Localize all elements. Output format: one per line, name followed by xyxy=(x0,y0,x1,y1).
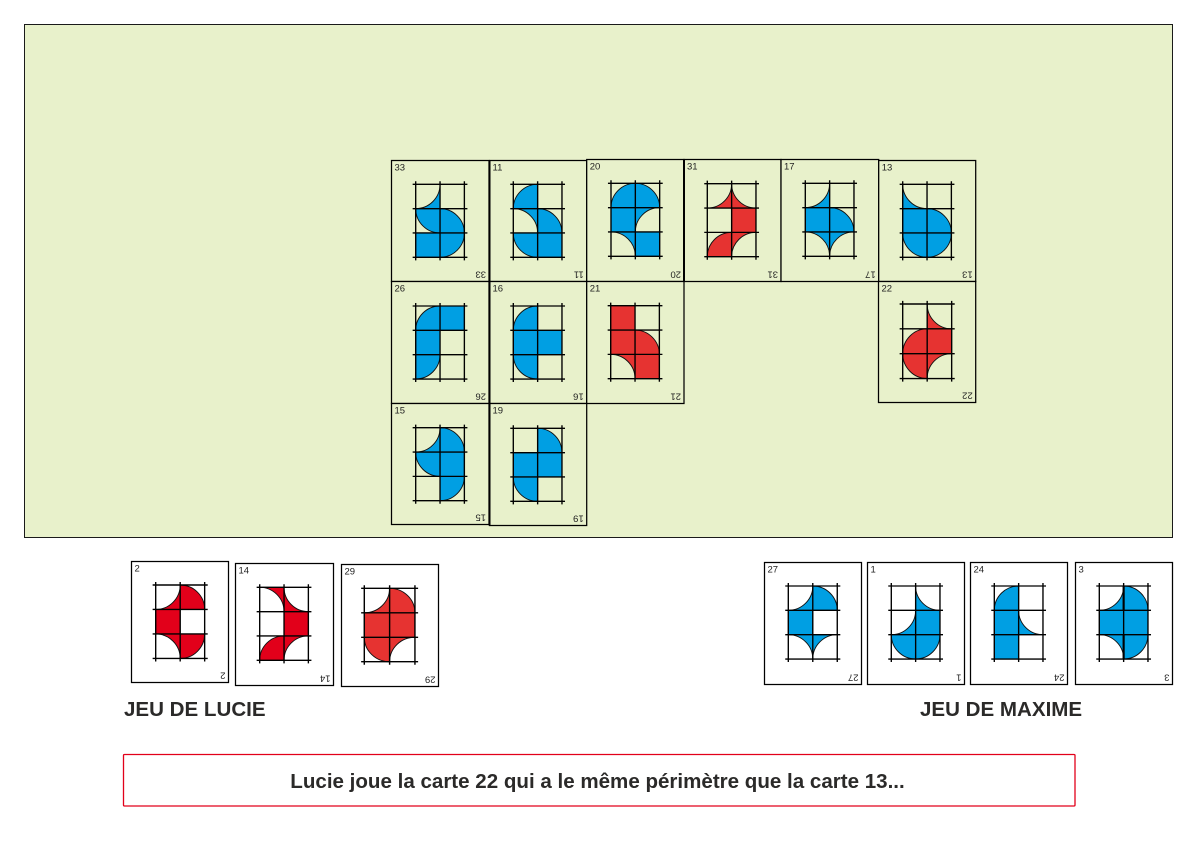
card 26: 26 xyxy=(394,284,405,294)
card 22: 22 xyxy=(882,284,892,294)
card 13: 13 xyxy=(962,268,973,280)
card 22 xyxy=(878,282,976,402)
panel: game board xyxy=(24,24,1172,538)
card 2 (Lucie): 2 xyxy=(220,670,226,680)
card 1 (Maxime) xyxy=(868,562,964,684)
card 13: 13 xyxy=(882,162,892,174)
callout: move description xyxy=(124,754,1075,806)
card 15: 15 xyxy=(475,512,486,522)
card 33: 33 xyxy=(394,162,405,174)
heading: Maxime's hand: JEU DE MAXIME xyxy=(920,698,1082,721)
card 24 (Maxime) xyxy=(970,562,1068,684)
card 21: 21 xyxy=(590,284,600,294)
card 31: 31 xyxy=(767,268,778,280)
card 2 (Lucie) xyxy=(132,562,228,682)
card 17: 17 xyxy=(865,268,876,280)
card 15 xyxy=(392,404,489,524)
card 11 xyxy=(490,160,587,282)
card 29 (Lucie): 29 xyxy=(425,674,436,684)
card 29 (Lucie): 29 xyxy=(344,566,355,578)
card 22: 22 xyxy=(962,390,973,400)
card 24 (Maxime): 24 xyxy=(1054,672,1064,682)
card 11: 11 xyxy=(492,162,502,174)
card 24 (Maxime): 24 xyxy=(974,564,984,576)
card 33: 33 xyxy=(475,268,486,280)
card 20 xyxy=(587,160,684,282)
card 26: 26 xyxy=(475,390,486,402)
card 27 (Maxime) xyxy=(764,562,862,684)
heading: Lucie's hand: JEU DE LUCIE xyxy=(124,698,266,721)
card 15: 15 xyxy=(394,406,405,416)
card 27 (Maxime): 27 xyxy=(768,564,778,576)
card 14 (Lucie): 14 xyxy=(238,566,249,576)
card 21: 21 xyxy=(670,390,681,402)
card 26 xyxy=(392,282,489,404)
card 33 xyxy=(392,160,489,282)
card 31: 31 xyxy=(687,162,698,172)
card 27 (Maxime): 27 xyxy=(848,672,858,682)
card 19 xyxy=(490,404,587,526)
card 19: 19 xyxy=(573,512,584,524)
card 20: 20 xyxy=(670,268,681,280)
card 16 xyxy=(490,282,587,404)
card 20: 20 xyxy=(590,162,600,172)
card 29 (Lucie) xyxy=(342,564,438,686)
card 16: 16 xyxy=(573,390,584,402)
card 17 xyxy=(781,160,879,282)
card 1 (Maxime): 1 xyxy=(870,564,876,576)
card 21 xyxy=(587,282,684,404)
card 19: 19 xyxy=(492,406,503,416)
card 3 (Maxime): 3 xyxy=(1078,564,1084,576)
card 13 xyxy=(879,160,976,282)
card 14 (Lucie): 14 xyxy=(320,672,330,684)
card 16: 16 xyxy=(492,284,503,294)
card 14 (Lucie) xyxy=(236,564,334,686)
card 1 (Maxime): 1 xyxy=(956,672,962,682)
card 17: 17 xyxy=(784,162,795,172)
callout: move description: Lucie joue la carte 22 qui a le même périmètre que la carte 13... xyxy=(290,770,905,793)
card 2 (Lucie): 2 xyxy=(134,564,140,574)
card 11: 11 xyxy=(574,268,584,280)
card 3 (Maxime): 3 xyxy=(1164,672,1170,682)
card 31 xyxy=(684,160,781,282)
card 3 (Maxime) xyxy=(1076,562,1172,684)
